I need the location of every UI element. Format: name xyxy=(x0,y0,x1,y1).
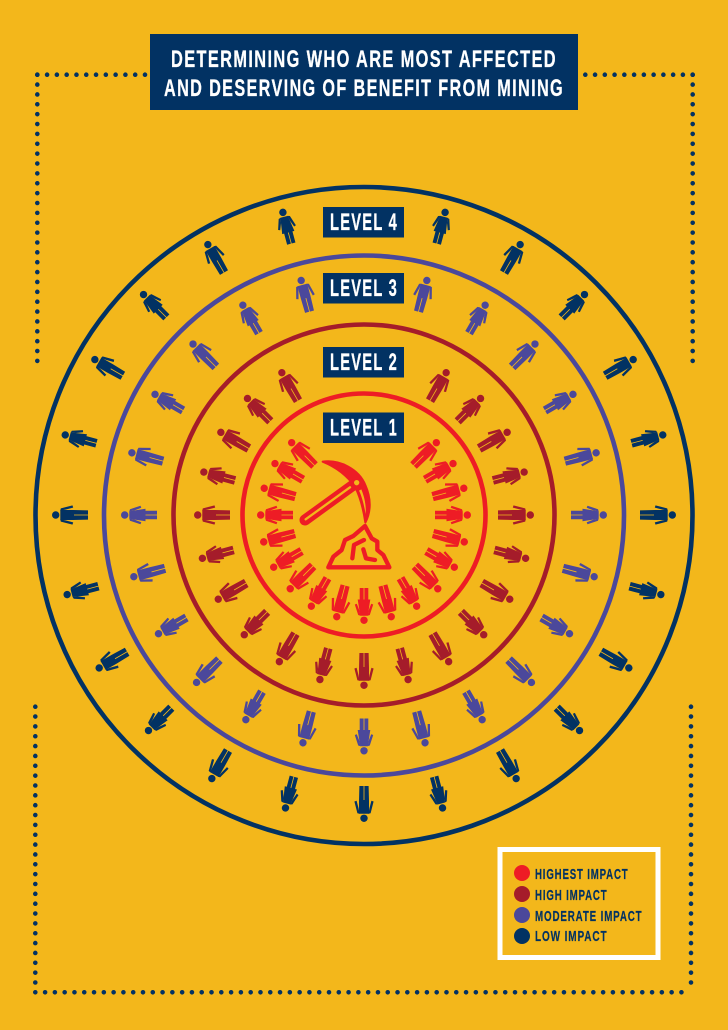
ring: level 2 xyxy=(174,324,554,706)
label: level 1 xyxy=(323,412,404,443)
legend item: highest impact: HIGHEST IMPACT xyxy=(535,866,628,883)
legend item: moderate impact xyxy=(514,907,642,925)
ring: level 3 xyxy=(104,256,624,776)
title xyxy=(150,34,578,110)
icon: pickaxe and rock xyxy=(305,461,389,567)
label: level 2 xyxy=(323,347,404,378)
ring: level 4 xyxy=(36,187,692,844)
title: DETERMINING WHO ARE MOST AFFECTED xyxy=(171,46,557,73)
people: level 2, high impact xyxy=(194,365,534,689)
label: level 1: LEVEL 1 xyxy=(330,414,398,442)
legend item: highest impact xyxy=(514,865,628,883)
legend item: low impact: LOW IMPACT xyxy=(535,928,608,945)
label: level 4: LEVEL 4 xyxy=(330,209,398,236)
legend item: high impact xyxy=(514,886,608,904)
label: level 3: LEVEL 3 xyxy=(330,275,398,302)
legend xyxy=(500,850,658,958)
legend item: low impact xyxy=(514,928,608,945)
people: level 3, moderate impact xyxy=(121,274,607,754)
ring: level 1 xyxy=(242,394,486,636)
legend item: moderate impact: MODERATE IMPACT xyxy=(535,908,642,925)
legend item: high impact: HIGH IMPACT xyxy=(535,887,608,904)
label: level 4 xyxy=(323,207,404,238)
label: level 2: LEVEL 2 xyxy=(330,349,398,376)
people: level 1, highest impact xyxy=(257,433,471,624)
label: level 3 xyxy=(323,273,404,304)
people: level 4, low impact xyxy=(52,206,676,822)
